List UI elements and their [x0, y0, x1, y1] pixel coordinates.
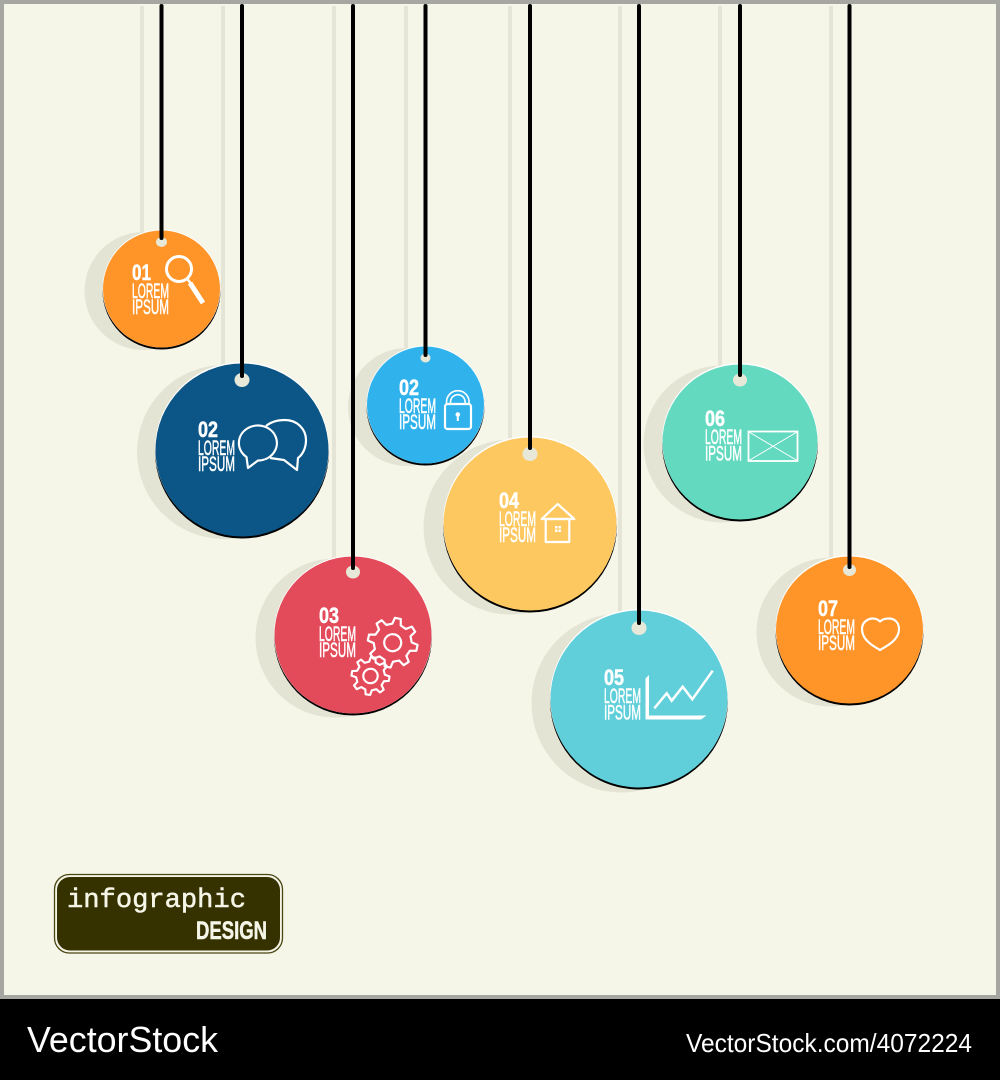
label 03 — [319, 603, 356, 662]
string 02 — [240, 6, 244, 376]
label 05: 05 — [604, 665, 624, 690]
string 04 — [528, 6, 532, 448]
label 02: IPSUM — [198, 453, 235, 476]
label lock tag: 02 — [399, 375, 419, 400]
string 03 — [351, 6, 355, 568]
panel: yellow tag 04 — [424, 6, 617, 614]
label 04 — [499, 488, 536, 547]
label 07: 07 — [818, 596, 838, 621]
label 04: 04 — [499, 488, 520, 513]
label 07 — [818, 596, 855, 655]
hole 04 — [522, 447, 538, 461]
label 01: IPSUM — [132, 296, 169, 319]
panel: yellow tag 04: LOREM — [499, 508, 536, 531]
hole 03 — [346, 566, 360, 578]
label 03: IPSUM — [319, 639, 356, 662]
string lock tag — [424, 6, 428, 355]
label 05 — [604, 665, 641, 724]
hole lock tag — [420, 354, 430, 362]
icon: envelope — [748, 432, 798, 461]
panel: orange tag 01: LOREM — [132, 280, 169, 303]
panel: cyan tag 05 — [532, 6, 728, 792]
label 03: 03 — [319, 603, 339, 628]
hole 02 — [234, 373, 250, 387]
string 06 — [738, 6, 742, 375]
hole 06 — [733, 374, 747, 386]
panel: cyan tag 05: LOREM — [604, 685, 641, 708]
footer: watermark bar — [0, 999, 1000, 1080]
badge title: infographic — [67, 886, 246, 916]
icon: house — [542, 504, 574, 542]
label 06: 06 — [705, 406, 725, 431]
panel: red tag 03 — [256, 6, 432, 718]
panel: red tag 03: LOREM — [319, 623, 356, 646]
icon: speech bubbles — [239, 420, 306, 470]
label 02: 02 — [198, 417, 218, 442]
label 04: IPSUM — [499, 524, 536, 547]
hole 05 — [632, 621, 646, 635]
panel: orange tag 07: LOREM — [818, 616, 855, 639]
hole 01 — [156, 237, 167, 247]
icon: heart — [862, 618, 899, 650]
string 01 — [160, 6, 164, 238]
label 05: IPSUM — [604, 702, 641, 724]
badge: infographic design — [54, 874, 282, 953]
label lock tag — [399, 375, 436, 434]
panel: teal tag 06 — [644, 6, 818, 522]
label 01: 01 — [132, 260, 151, 285]
watermark logo text: VectorStock — [27, 1019, 219, 1060]
icon: magnifier — [166, 256, 203, 303]
panel: orange tag 07 — [756, 6, 924, 706]
label 01 — [132, 260, 169, 319]
panel: blue tag 02 — [137, 6, 329, 539]
badge subtitle: DESIGN — [196, 917, 267, 945]
string 05 — [637, 6, 641, 623]
icon: line chart — [646, 671, 713, 720]
label 06 — [705, 406, 742, 466]
label 02 — [198, 417, 235, 476]
icon: padlock — [445, 391, 471, 429]
panel: teal tag 06: LOREM — [705, 426, 742, 449]
panel: orange tag 01 — [84, 6, 220, 350]
label 07: IPSUM — [818, 632, 855, 655]
panel: light blue tag with lock: LOREM — [399, 395, 436, 418]
icon: gears — [349, 613, 422, 697]
watermark url: VectorStock.com/4072224 — [686, 1028, 972, 1058]
string 07 — [848, 6, 852, 567]
label 06: IPSUM — [705, 442, 742, 466]
panel: light blue tag with lock — [348, 6, 484, 466]
label lock tag: IPSUM — [399, 411, 436, 434]
hole 07 — [843, 564, 856, 576]
panel: blue tag 02: LOREM — [198, 437, 235, 460]
